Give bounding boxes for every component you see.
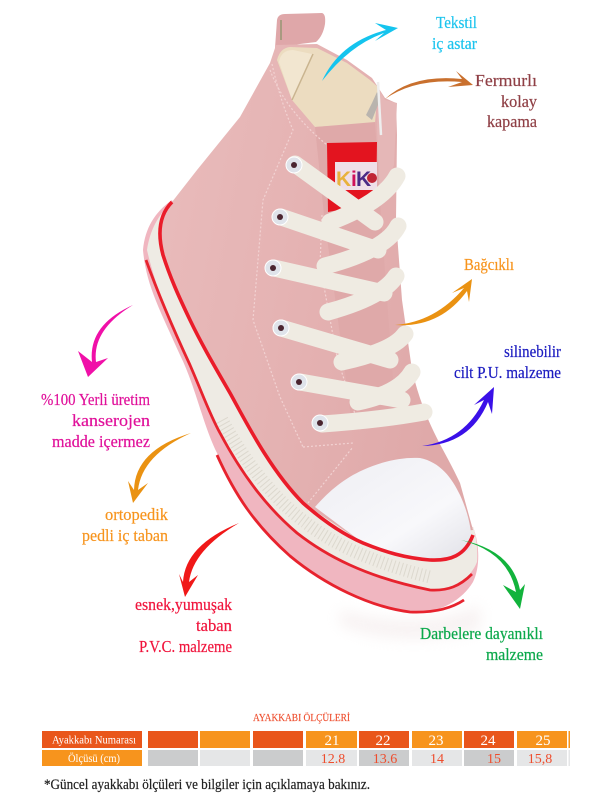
- upper: [160, 44, 473, 543]
- laces: [274, 164, 424, 424]
- arrow: flexible sole: [179, 523, 239, 597]
- label: textile: iç astar: [432, 34, 477, 53]
- label: flexible sole: esnek,yumuşak: [135, 595, 233, 614]
- label: zipper: [475, 71, 538, 131]
- row: shoe number: 22: [376, 733, 390, 749]
- arrow: P.U. material: [422, 387, 494, 446]
- arrow: impact resistant: [461, 540, 525, 609]
- label: textile: Tekstil: [436, 13, 477, 32]
- arrow: textile: [322, 23, 398, 81]
- arrow: laces: [395, 279, 472, 325]
- tongue: [315, 122, 396, 425]
- sole red line 3: [217, 455, 464, 612]
- row: length in cm: 15,8: [528, 752, 552, 767]
- row: length in cm: [42, 750, 570, 767]
- sole red line 1: [160, 202, 473, 560]
- row: shoe number: 25: [536, 733, 550, 749]
- brand label: i: [351, 168, 357, 191]
- label: local production: [41, 390, 150, 451]
- sole white band: [147, 202, 477, 590]
- label: local production: kanserojen: [72, 411, 150, 430]
- label: zipper: kolay: [501, 92, 538, 111]
- sole red line 2: [146, 260, 472, 590]
- sole outer: [143, 200, 478, 613]
- row: shoe number: 23: [428, 733, 444, 749]
- footnote: *Güncel ayakkabı ölçüleri ve bilgiler için açıklamaya bakınız.: [44, 777, 370, 793]
- label: impact resistant: Darbelere dayanıklı: [420, 624, 543, 643]
- label: P.U. material: [454, 342, 561, 382]
- row: length in cm: 14: [430, 752, 444, 767]
- label: impact resistant: [420, 624, 543, 664]
- arrow: local production: [78, 305, 133, 377]
- heel tab: [275, 13, 325, 48]
- red tongue label: [327, 142, 377, 212]
- label: orthopedic: pedli iç taban: [82, 526, 168, 545]
- brand label: K: [336, 168, 351, 191]
- stitching: [253, 64, 360, 503]
- brand label: [335, 162, 377, 191]
- eyelets: [265, 157, 328, 431]
- label: zipper: kapama: [487, 112, 538, 131]
- arrow: orthopedic: [128, 433, 191, 503]
- toe cap: [315, 458, 472, 558]
- row: length in cm: 12.8: [321, 752, 345, 767]
- row: length in cm: 13.6: [373, 752, 397, 767]
- ground shadow: [340, 605, 480, 639]
- label: flexible sole: [135, 595, 233, 656]
- label: textile: [432, 13, 477, 53]
- zipper: [366, 82, 397, 200]
- label: orthopedic: ortopedik: [105, 505, 169, 524]
- label: impact resistant: malzeme: [486, 645, 543, 664]
- size table: [42, 712, 570, 767]
- label: local production: %100 Yerli üretim: [41, 390, 150, 409]
- label: flexible sole: taban: [196, 616, 232, 635]
- row: shoe number: [42, 731, 570, 749]
- row: shoe number: 24: [480, 733, 496, 749]
- row: length in cm: Ölçüsü (cm): [68, 751, 120, 765]
- row: shoe number: Ayakkabı Numarası: [52, 732, 137, 746]
- label: flexible sole: P.V.C. malzeme: [139, 637, 232, 656]
- brand label: K: [356, 168, 371, 191]
- row: shoe number: 21: [324, 733, 340, 749]
- label: zipper: Fermurlı: [475, 71, 537, 90]
- row: length in cm: 15: [487, 752, 501, 767]
- arrow: zipper: [385, 71, 473, 99]
- label: laces: Bağcıklı: [464, 255, 514, 274]
- shoe: [143, 13, 480, 639]
- lining: [277, 47, 378, 127]
- table title: AYAKKABI ÖLÇÜLERİ: [253, 712, 350, 724]
- label: orthopedic: [82, 505, 169, 545]
- label: local production: madde içermez: [52, 432, 150, 451]
- label: P.U. material: silinebilir: [504, 342, 561, 361]
- label: P.U. material: cilt P.U. malzeme: [454, 363, 561, 382]
